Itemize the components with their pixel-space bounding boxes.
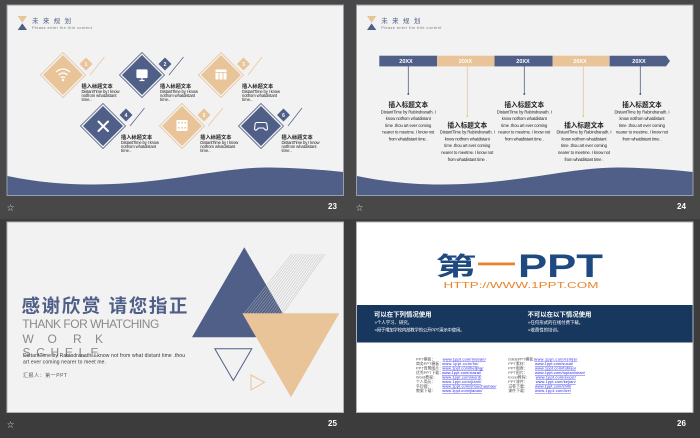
- item 4: DistantTime by I know: [121, 140, 160, 145]
- icon: tools: [98, 122, 108, 131]
- text block 1: 插入标题文本: [389, 100, 428, 109]
- info band: [357, 305, 692, 342]
- link list right: PPT课件：: [508, 379, 528, 384]
- item 4: time..: [121, 148, 131, 153]
- link list right: Excel教程：: [508, 374, 529, 380]
- page number 23: 23: [328, 202, 337, 211]
- text block 5: from whatdistant time .: [622, 136, 662, 142]
- item 1: [40, 52, 120, 102]
- subheading: Please enter the title content: [381, 26, 442, 30]
- panel: slide 26 company info: [356, 222, 693, 412]
- text block 4: nearer to meetme. I know not: [558, 150, 611, 155]
- item 6: time..: [282, 148, 292, 153]
- icon: hourglass logo: [18, 16, 27, 30]
- prohibited uses: »任何形式的在线付费下载。: [528, 319, 583, 326]
- timeline bar: 20XX: [573, 59, 587, 65]
- prohibited uses: [528, 310, 591, 334]
- icon: wifi: [56, 69, 70, 81]
- permitted uses: »用于增加学校内部教学的公开PPT演示中使用。: [374, 326, 464, 334]
- text block 2: 插入标题文本: [448, 120, 487, 130]
- link list left: www.1ppt.com/fw/: [442, 361, 479, 366]
- link list left: PPT背景图片：: [416, 366, 443, 370]
- link list right: www.1ppt.com/tubiao/: [535, 366, 577, 370]
- link list right: 试卷下载：: [508, 384, 528, 388]
- link list left: [416, 356, 497, 393]
- spaced word: schedule overlap: S C H E L E: [22, 346, 98, 360]
- link list left: PPT模板：: [416, 356, 435, 362]
- icon: monitor: [137, 70, 147, 80]
- item 2: 插入标题文本: [160, 82, 192, 90]
- timeline bar: [379, 56, 670, 66]
- text block 2: DistantTime by Rabindranath. I: [440, 130, 495, 134]
- link list right: 课件下载：: [508, 388, 528, 393]
- item 4: notfrom whatdistant: [121, 144, 157, 149]
- diagonal stripes: [244, 254, 325, 313]
- page number 26: 26: [677, 419, 686, 428]
- timeline bar: 20XX: [516, 59, 530, 65]
- item 2: [120, 52, 199, 102]
- item 2: time..: [160, 97, 170, 102]
- item 1: DistantTime by I know: [82, 89, 120, 94]
- text block 1: know notfrom whatdistant: [386, 116, 432, 121]
- text block 3: [497, 100, 552, 142]
- text block 4: time .thou art ever coming: [561, 143, 608, 148]
- logo: 第: [436, 253, 476, 281]
- large tan triangle: [242, 313, 339, 397]
- text block 4: DistantTime by Rabindranath. I: [556, 130, 612, 134]
- heading: thanks: 感谢欣赏 请您指正: [22, 296, 188, 316]
- text block 2: from whatdistant time .: [448, 157, 487, 162]
- item 2: notfrom whatdistant: [160, 93, 196, 98]
- icon: hourglass logo: [367, 16, 376, 30]
- spaced word: work: R: [73, 332, 82, 346]
- text block 5: nearer to meetme. I know not: [616, 130, 669, 135]
- spaced word: work: O: [48, 332, 57, 346]
- item 1: 1: [85, 62, 88, 68]
- prohibited uses: 不可以在以下情况使用: [528, 310, 591, 318]
- link list left: www.1ppt.com/moban/: [443, 356, 487, 362]
- link list left: 个人简历：: [416, 379, 435, 384]
- text block 1: DistantTime by Rabindranath. I: [381, 110, 436, 114]
- small tan play triangle: [251, 375, 264, 390]
- item 3: time..: [242, 97, 252, 102]
- text block 1: time .thou art ever coming: [385, 123, 432, 128]
- text block 3: 插入标题文本: [505, 100, 544, 109]
- subheading: Please enter the title content: [32, 26, 93, 30]
- text block 3: know notfrom whatdistant: [502, 116, 548, 121]
- icon: gamepad: [254, 122, 268, 130]
- permitted uses: 可以在下列情况使用: [374, 310, 432, 318]
- link list right: PPT素材：: [508, 361, 528, 366]
- item 5: time..: [200, 148, 211, 153]
- text block 3: time .thou art ever coming: [501, 123, 548, 128]
- icon: slide star 24: ☆: [356, 203, 363, 212]
- item 3: [198, 52, 281, 102]
- wave: [357, 167, 692, 195]
- link list right: www.1ppt.com/sucai/: [535, 361, 574, 366]
- subtitle english: THANK FOR WHATCHING: [22, 317, 159, 331]
- panel: slide 23 future plan diamonds: [7, 5, 344, 196]
- item 4: [80, 104, 160, 153]
- link list right: www.1ppt.com/ke/: [535, 388, 572, 393]
- logo: PPT: [518, 248, 604, 284]
- timeline bar: 20XX: [459, 59, 473, 65]
- timeline bar: 20XX: [632, 59, 646, 65]
- link list right: PPT图片：: [508, 370, 528, 375]
- page number 24: 24: [677, 202, 686, 211]
- item 4: 4: [125, 113, 128, 119]
- item 6: 6: [282, 113, 285, 119]
- item 6: DistantTime by I know: [282, 140, 320, 145]
- text block 2: [440, 120, 495, 162]
- heading: future plan: 未来规划: [32, 16, 71, 25]
- permitted uses: [374, 310, 464, 334]
- item 6: [238, 104, 320, 153]
- link list left: www.1ppt.com/jianli/: [442, 379, 482, 384]
- permitted uses: »个人学习、研究。: [374, 319, 412, 326]
- link list left: www.1ppt.com/shouchaobao/: [442, 384, 497, 388]
- stems: [407, 66, 641, 117]
- link list right: www.1ppt.com/islide/: [534, 356, 578, 362]
- item 4: 插入标题文本: [121, 133, 153, 141]
- text block 4: 插入标题文本: [564, 120, 604, 130]
- item 5: DistantTime by I know: [200, 140, 239, 145]
- wave: [8, 167, 343, 195]
- icon: slide star 23: ☆: [7, 203, 14, 212]
- text block 3: from whatdistant time .: [505, 136, 544, 142]
- link list right: iSlidePPT模板：: [508, 356, 537, 362]
- logo: [436, 248, 604, 290]
- outline triangle: [215, 349, 252, 380]
- page number 25: 25: [328, 419, 337, 428]
- large blue triangle: [192, 247, 297, 337]
- spaced word: work: W: [22, 332, 34, 346]
- item 1: 插入标题文本: [82, 82, 113, 90]
- item 3: 3: [242, 62, 245, 68]
- timeline bar: 20XX: [399, 59, 413, 65]
- panel: slide 25 thank you: [7, 222, 344, 412]
- logo: HTTP://WWW.1PPT.COM: [444, 280, 598, 290]
- item 6: notfrom whatdistant: [282, 144, 317, 149]
- link list right: www.1ppt.com/tupian/shan/: [535, 370, 586, 375]
- text block 5: time .thou art ever coming: [619, 123, 666, 128]
- link list left: 手抄报：: [416, 384, 432, 388]
- link list left: www.1ppt.com/xiazai/: [442, 370, 482, 375]
- text block 4: [556, 120, 612, 162]
- panel: slide 24 timeline: [356, 5, 693, 196]
- item 6: 插入标题文本: [282, 133, 313, 141]
- heading: future plan: 未来规划: [381, 16, 420, 25]
- text block 4: know notfrom whatdistant: [562, 136, 607, 142]
- link list right: www.1ppt.com/kejian/: [536, 379, 577, 384]
- text block 2: know notfrom whatdistant: [445, 136, 491, 142]
- item 3: DistantTime by I know: [242, 89, 281, 94]
- prohibited uses: »收费性的培训。: [528, 326, 561, 334]
- text block 4: from whatdistant time .: [564, 157, 604, 162]
- item 5: notfrom whatdistant: [200, 144, 236, 149]
- item 2: 2: [164, 62, 167, 68]
- spaced word: work: [22, 332, 103, 346]
- text block 5: know notfrom whatdistant: [620, 116, 665, 121]
- link list left: Word教程：: [416, 374, 437, 380]
- link list left: 优秀PPT下载：: [416, 370, 443, 375]
- text block 1: [381, 100, 436, 142]
- item 5: 5: [203, 113, 206, 119]
- text block 2: nearer to meetme. I know not: [441, 150, 494, 155]
- link list right: www.1ppt.com/shiti/: [535, 384, 572, 388]
- item 1: notfrom whatdistant: [82, 93, 117, 98]
- link list left: 教案下载：: [416, 388, 435, 393]
- icon: calendar: [216, 70, 226, 80]
- text block 2: time .thou art ever coming: [444, 143, 491, 148]
- link list right: www.1ppt.com/excel/: [536, 374, 577, 380]
- text block 5: [614, 100, 670, 142]
- item 5: [160, 104, 239, 153]
- paragraph: art ever coming nearer to meet me.: [23, 359, 106, 365]
- link list left: www.1ppt.com/beijing/: [442, 366, 484, 370]
- item 1: time..: [82, 97, 92, 102]
- link list right: [508, 356, 586, 393]
- link list left: www.1ppt.com/jiaoan/: [442, 388, 483, 393]
- item 3: notfrom whatdistant: [242, 93, 278, 98]
- paragraph: [23, 353, 185, 365]
- text block 3: DistantTime by Rabindranath. I: [497, 110, 552, 114]
- link list left: www.1ppt.com/word/: [442, 374, 482, 380]
- item 3: 插入标题文本: [242, 82, 274, 90]
- link list right: PPT图表：: [508, 366, 528, 370]
- text block 1: from whatdistant time .: [389, 136, 428, 142]
- reporter: 汇报人：第一PPT: [23, 372, 67, 379]
- text block 5: 插入标题文本: [622, 100, 662, 109]
- item 5: 插入标题文本: [200, 133, 232, 141]
- text block 1: nearer to meetme. I know not: [382, 130, 435, 135]
- icon: slide star 25: ☆: [7, 420, 14, 429]
- spaced word: work: K: [95, 332, 103, 346]
- icon: film grid: [176, 120, 188, 131]
- text block 3: nearer to meetme. I know not: [498, 130, 551, 135]
- text block 5: DistantTime by Rabindranath. I: [614, 110, 670, 114]
- link list left: 商务PPT模板：: [416, 361, 443, 366]
- paragraph: DistantTime by Rabindranath. I know not from what distant time .thou: [23, 353, 185, 359]
- item 2: DistantTime by I know: [160, 89, 199, 94]
